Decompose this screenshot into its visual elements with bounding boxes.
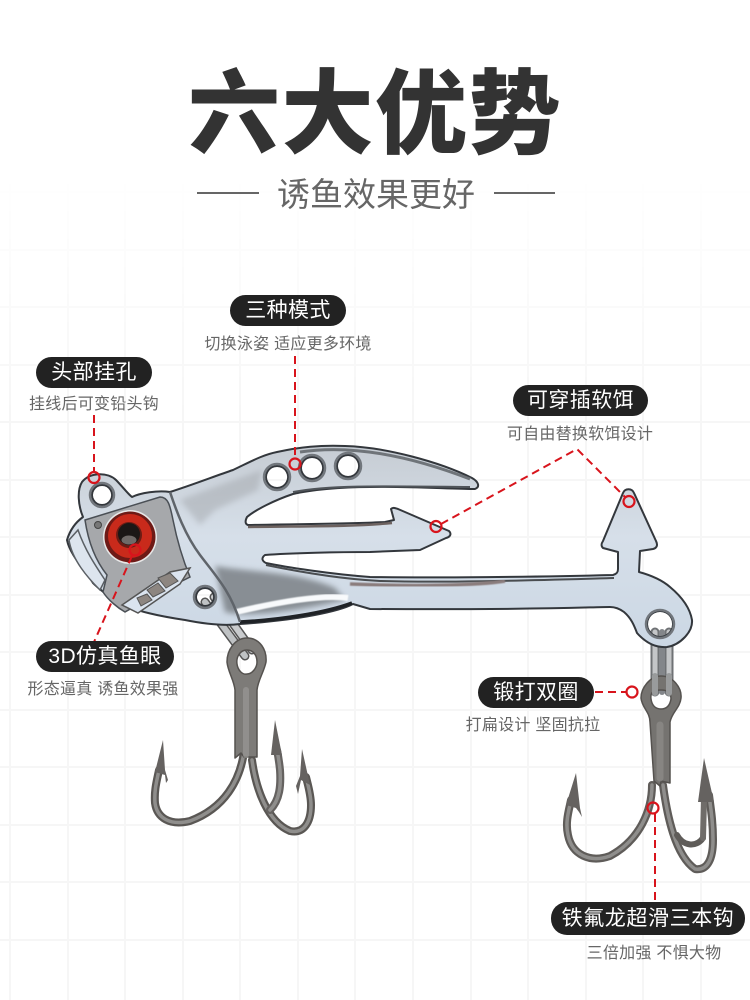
label: 3D fish eye xyxy=(36,641,174,672)
shading and reflections xyxy=(170,450,614,622)
label: forged ring: 锻打双圈 xyxy=(493,681,579,704)
caption: teflon hook: 三倍加强 不惧大物 xyxy=(587,945,721,962)
subtitle rules xyxy=(197,192,555,194)
label: three modes xyxy=(230,295,346,326)
lure body xyxy=(67,446,692,656)
metal lure plate xyxy=(67,446,692,647)
caption: forged ring: 打扁设计 坚固抗拉 xyxy=(466,717,600,734)
head plate xyxy=(85,497,190,612)
leader: teflon hook xyxy=(654,814,656,900)
left treble hook xyxy=(155,638,311,831)
hole rims xyxy=(90,453,674,638)
label: head hole: 头部挂孔 xyxy=(51,361,137,384)
label: 3D fish eye: 3D仿真鱼眼 xyxy=(48,645,162,668)
right split ring xyxy=(655,632,669,692)
caption: soft bait: 可自由替换软饵设计 xyxy=(507,426,653,443)
label: teflon hook: 铁氟龙超滑三本钩 xyxy=(562,907,734,930)
leader: fish eye xyxy=(94,556,132,642)
red ring markers xyxy=(88,458,658,814)
subtitle: 诱鱼效果更好 xyxy=(277,176,475,213)
leader: forged ring xyxy=(595,691,626,693)
label: teflon hook xyxy=(551,902,745,935)
leader: head hole xyxy=(93,415,95,472)
label: three modes: 三种模式 xyxy=(245,299,331,322)
annotation dashed lines and markers xyxy=(94,356,655,900)
label: soft bait xyxy=(513,385,648,416)
caption: 3D fish eye: 形态逼真 诱鱼效果强 xyxy=(28,681,178,698)
title: 六大优势 xyxy=(188,64,562,166)
fish eye xyxy=(103,510,157,564)
leader: three modes xyxy=(294,356,296,458)
right treble hook xyxy=(566,676,714,869)
leader: soft bait xyxy=(441,449,625,524)
label: soft bait: 可穿插软饵 xyxy=(527,389,634,412)
label: head hole xyxy=(36,357,152,388)
split ring: left xyxy=(205,597,252,656)
caption: three modes: 切换泳姿 适应更多环境 xyxy=(204,336,372,353)
label: forged ring xyxy=(478,677,594,708)
caption: head hole: 挂线后可变铅头钩 xyxy=(29,396,159,413)
